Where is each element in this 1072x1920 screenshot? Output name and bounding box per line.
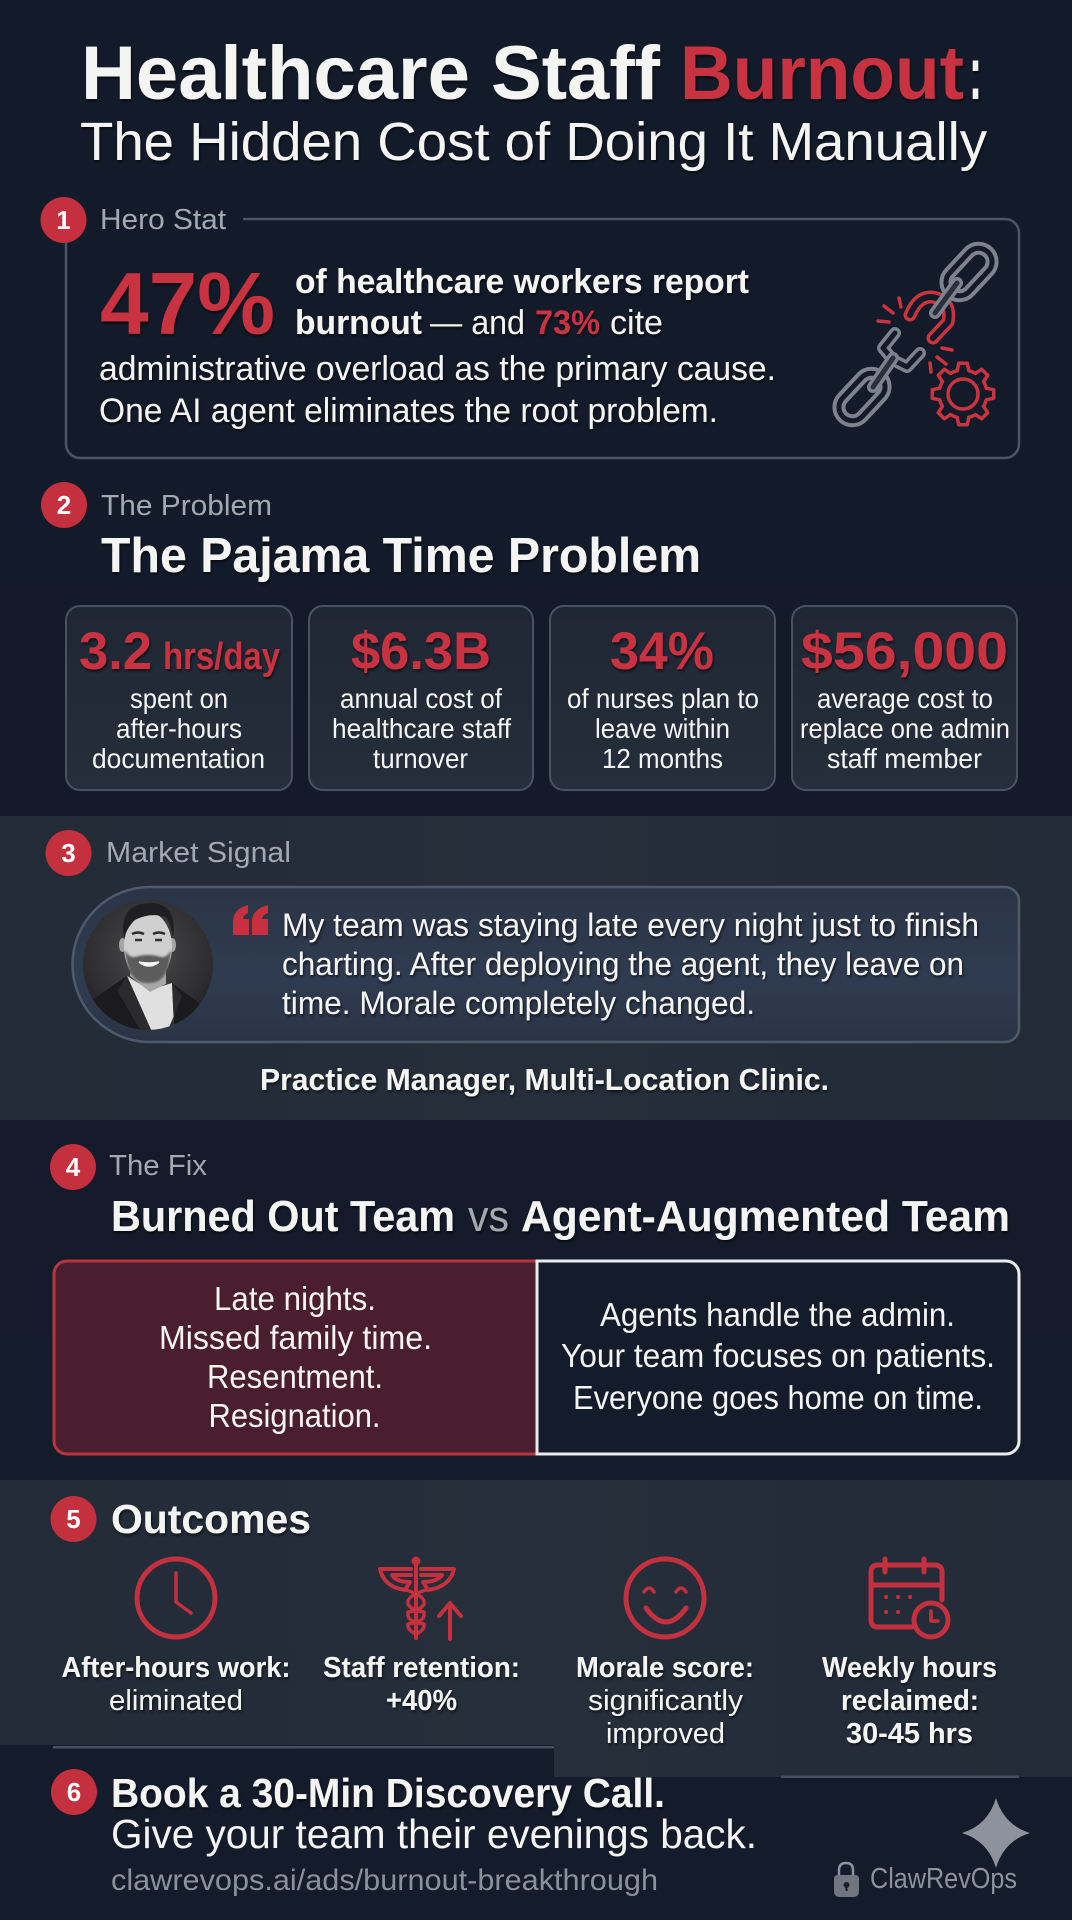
comparison: burned out team: Resentment.	[207, 1358, 383, 1395]
outcome text	[822, 1652, 997, 1750]
quote text: time. Morale completely changed.	[282, 985, 755, 1021]
band: outcomes background	[0, 1480, 1072, 1777]
section 3 label: Market Signal	[106, 837, 291, 869]
stat card: turnover cost: $6.3B	[351, 622, 491, 681]
hero text block	[99, 263, 776, 430]
stat card: replacement cost: $56,000	[801, 622, 1008, 681]
icon: clock	[137, 1559, 215, 1637]
outcome text	[62, 1652, 290, 1717]
section 4 heading: Agent-Augmented Team	[521, 1192, 1010, 1241]
comparison: agent-augmented team: Your team focuses on patients.	[561, 1337, 995, 1374]
section 3 badge	[46, 830, 92, 876]
hero text block: 73%	[535, 304, 600, 342]
section 4 label: The Fix	[109, 1150, 208, 1182]
stat card: hours per day: hrs/day	[163, 636, 280, 678]
section 4 heading: Burned Out Team	[111, 1192, 455, 1241]
title line 1: Burnout	[680, 31, 964, 116]
panel: outcomes	[50, 1496, 997, 1750]
comparison: burned out team	[54, 1261, 537, 1454]
panel: the fix	[50, 1144, 1019, 1454]
outcome text: 30-45 hrs	[846, 1718, 973, 1750]
title line 1: Healthcare Staff	[81, 31, 661, 116]
title	[80, 31, 987, 172]
stat card: turnover cost: healthcare staff	[332, 713, 511, 744]
hero text block: administrative overload as the primary cause.	[99, 350, 776, 388]
section 4 heading	[111, 1192, 1010, 1241]
stat card: replacement cost: staff member	[827, 743, 982, 774]
stat card: nurses leaving: 12 months	[602, 743, 723, 774]
comparison: burned out team: Resignation.	[208, 1397, 380, 1434]
icon: broken chain and gear	[827, 236, 1004, 433]
title line 1	[81, 31, 982, 116]
stat card: nurses leaving	[550, 606, 775, 790]
hero text block: of healthcare workers report	[295, 263, 749, 301]
outcome: after-hours work	[62, 1559, 290, 1717]
band: market signal background	[0, 816, 1072, 1120]
comparison: burned out team: Late nights.	[214, 1280, 376, 1317]
section 5 badge: 5	[66, 1504, 81, 1534]
outcome text	[576, 1652, 754, 1750]
icon: caduceus with up arrow	[380, 1558, 461, 1639]
outcome text: +40%	[386, 1685, 457, 1717]
CTA url: clawrevops.ai/ads/burnout-breakthrough	[111, 1864, 658, 1897]
stat card: turnover cost: turnover	[373, 743, 468, 774]
icon: quote mark	[233, 905, 268, 935]
title line 1: :	[969, 31, 982, 116]
section 4 badge: 4	[66, 1152, 81, 1182]
comparison: burned out team: Missed family time.	[159, 1319, 432, 1356]
panel: hero stat	[40, 197, 1019, 458]
portrait	[83, 900, 213, 1040]
outcome text: Weekly hours	[822, 1652, 997, 1684]
stat card: hours per day: 3.2	[79, 622, 152, 681]
section 3 badge: 3	[61, 838, 76, 868]
quote attribution: Practice Manager, Multi-Location Clinic.	[260, 1062, 829, 1097]
outcome text: improved	[606, 1718, 725, 1750]
outcome text: After-hours work:	[62, 1652, 290, 1684]
outcome text: Morale score:	[576, 1652, 754, 1684]
stat card: turnover cost	[309, 606, 533, 790]
section 6 badge	[51, 1769, 97, 1815]
outcome: weekly hours	[822, 1559, 997, 1750]
quote box	[72, 887, 1019, 1042]
section 2 label: The Problem	[101, 490, 272, 522]
stat card: nurses leaving: 34%	[610, 622, 714, 681]
quote text: charting. After deploying the agent, they leave on	[282, 946, 964, 982]
stat card: hours per day	[66, 606, 292, 790]
panel: the problem	[41, 482, 1017, 790]
stat card: replacement cost	[792, 606, 1017, 790]
comparison: agent-augmented team: Everyone goes home on time.	[573, 1379, 983, 1416]
stat card: replacement cost: replace one admin	[800, 713, 1010, 744]
stat card: turnover cost: annual cost of	[340, 683, 502, 714]
stat card: nurses leaving: leave within	[595, 713, 730, 744]
outcome text: Staff retention:	[323, 1652, 520, 1684]
brand name: ClawRevOps	[870, 1863, 1017, 1895]
panel: market signal	[46, 830, 1019, 1097]
icon: calendar with clock	[871, 1559, 948, 1637]
stat card: replacement cost: average cost to	[817, 683, 993, 714]
section 1 badge	[40, 197, 86, 243]
hero text block: One AI agent eliminates the root problem.	[99, 392, 718, 430]
icon: smiley	[626, 1559, 704, 1637]
hero text block: burnout	[295, 304, 422, 342]
outcome text: eliminated	[109, 1685, 243, 1717]
quote text: My team was staying late every night just to finish	[282, 907, 979, 943]
outcome text	[323, 1652, 520, 1717]
outcome: staff retention	[323, 1558, 520, 1717]
section 1 badge: 1	[56, 205, 71, 235]
hero text block: — and	[430, 304, 525, 342]
CTA subline: Give your team their evenings back.	[111, 1811, 757, 1857]
section 2 heading: The Pajama Time Problem	[101, 529, 701, 583]
hero box outline	[66, 219, 1019, 458]
stat card: hours per day: documentation	[92, 743, 265, 774]
CTA headline: Book a 30-Min Discovery Call.	[111, 1770, 665, 1816]
hero text block: cite	[610, 304, 663, 342]
outcome: morale score	[576, 1559, 754, 1750]
section 5 heading: Outcomes	[111, 1496, 311, 1542]
section 5 badge	[50, 1496, 96, 1542]
icon: lock	[834, 1863, 859, 1897]
section 2 badge: 2	[57, 490, 71, 520]
comparison: agent-augmented team	[537, 1261, 1019, 1454]
outcome text: significantly	[588, 1685, 744, 1717]
section 6 badge: 6	[67, 1777, 81, 1807]
big stat: 47%	[100, 254, 275, 353]
panel: call to action	[51, 1769, 1030, 1897]
stat card: nurses leaving: of nurses plan to	[567, 683, 759, 714]
outcome text: reclaimed:	[841, 1685, 979, 1717]
title line 2: The Hidden Cost of Doing It Manually	[80, 112, 987, 172]
quote text	[282, 907, 979, 1021]
stat card: hours per day: spent on	[130, 683, 228, 714]
section 4 badge	[50, 1144, 96, 1190]
section 1 label: Hero Stat	[100, 204, 226, 236]
comparison: agent-augmented team: Agents handle the admin.	[600, 1296, 955, 1333]
stat card: hours per day: after-hours	[116, 713, 242, 744]
section 2 badge	[41, 482, 87, 528]
icon: sparkle	[962, 1798, 1030, 1868]
section 4 heading: vs	[468, 1192, 509, 1241]
